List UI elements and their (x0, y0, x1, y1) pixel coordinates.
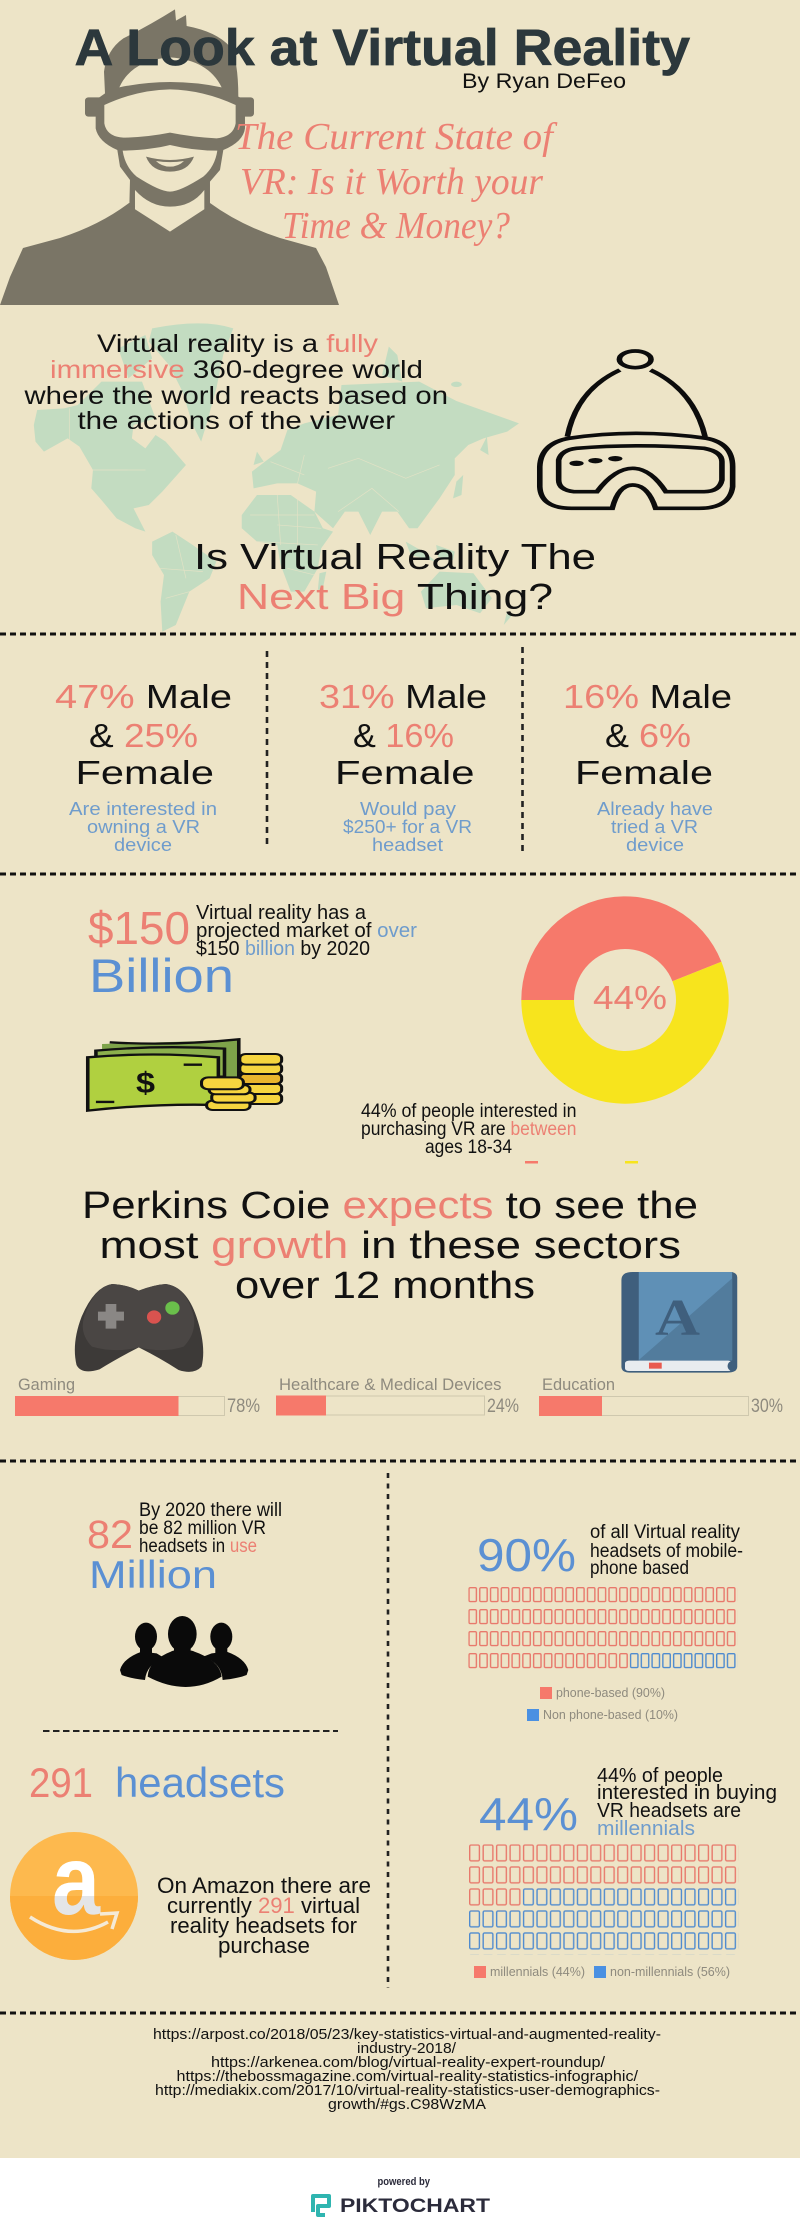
stat: 82 million headsets: headsets in use (139, 1536, 257, 1557)
legend: phone-based: Non phone-based (10%) (543, 1708, 678, 1722)
sources list (153, 2026, 661, 2113)
stat: 44 percent millennials: VR headsets are (597, 1800, 741, 1822)
icon: amazon logo: a (52, 1825, 101, 1935)
donut chart: 44% (593, 979, 667, 1016)
stat: 82 million headsets: Million (89, 1554, 217, 1597)
text: amazon headset count (157, 1873, 371, 1958)
title: A Look at Virtual Reality (74, 19, 691, 76)
stat: 90 percent mobile-phone based: 90% (477, 1529, 576, 1581)
sources list: http://mediakix.com/2017/10/virtual-reality-statistics-user-demographics- (155, 2082, 660, 2099)
intro text: Virtual reality is a fully (97, 330, 379, 358)
stat: 44 percent millennials (479, 1765, 777, 1840)
byline: By Ryan DeFeo (462, 70, 626, 93)
panel: already tried (563, 678, 732, 855)
sources list: https://thebossmagazine.com/virtual-reality-statistics-infographic/ (176, 2068, 639, 2085)
icon: book: A (655, 1290, 701, 1347)
stat: 90 percent mobile-phone based (477, 1522, 743, 1581)
footer: piktochart branding (313, 2176, 490, 2217)
stat: 90 percent mobile-phone based: headsets of mobile- (590, 1541, 743, 1562)
bar: gaming (15, 1375, 260, 1417)
text: amazon headset count: On Amazon there are (157, 1873, 371, 1898)
intro text: immersive 360-degree world (50, 356, 423, 384)
stat: 150 billion market: Virtual reality has a (196, 902, 367, 924)
panel: already tried: Already have (597, 799, 713, 819)
panel: would pay (319, 678, 487, 855)
donut chart caption (361, 1101, 576, 1158)
pictogram chart: phone-based headsets (468, 1587, 738, 1675)
bar: education: 30% (751, 1396, 783, 1417)
heading: next big thing: Next Big Thing? (237, 576, 553, 617)
stat: 150 billion market: $150 (88, 902, 190, 954)
donut chart caption: ages 18-34 (425, 1137, 512, 1158)
stat: 291 headsets (29, 1759, 285, 1806)
panel: already tried: device (626, 835, 684, 855)
intro text: where the world reacts based on (23, 382, 448, 410)
panel: would pay: Would pay (360, 799, 456, 819)
icon: book (621, 1272, 737, 1373)
text: amazon headset count: currently 291 virtual (167, 1893, 360, 1918)
icon: amazon logo (10, 1825, 138, 1960)
panel: interested in owning: & 25% (89, 717, 198, 754)
stat: 82 million headsets: By 2020 there will (139, 1500, 282, 1521)
panel: would pay: headset (372, 835, 443, 855)
intro text (23, 330, 448, 435)
sources list: https://arpost.co/2018/05/23/key-statistics-virtual-and-augmented-reality- (153, 2026, 661, 2043)
panel: interested in owning: device (114, 835, 172, 855)
legend: millennials (474, 1965, 730, 1979)
sources list: growth/#gs.C98WzMA (328, 2096, 486, 2113)
panel: would pay: 31% Male (319, 678, 487, 715)
heading: Perkins Coie growth: over 12 months (235, 1265, 535, 1307)
footer: piktochart branding: powered by (378, 2176, 431, 2188)
bar: gaming: 78% (227, 1396, 260, 1417)
icon: money and coins (88, 1039, 282, 1111)
heading: Perkins Coie growth: most growth in these sectors (100, 1225, 681, 1267)
panel: interested in owning: owning a VR (87, 817, 200, 837)
panel: would pay: & 16% (353, 717, 454, 754)
illustration: man wearing VR headset (0, 9, 339, 305)
subtitle in script lettering: VR: Is it Worth your (240, 161, 543, 203)
stat: 291 headsets: headsets (115, 1759, 285, 1806)
footer: piktochart branding: PIKTOCHART (340, 2196, 490, 2217)
panel: already tried: tried a VR (611, 817, 698, 837)
panel: interested in owning (55, 678, 232, 855)
stat: 90 percent mobile-phone based: of all Virtual reality (590, 1522, 740, 1543)
panel: interested in owning: 47% Male (55, 678, 232, 715)
donut legend swatches (clipped) (525, 1161, 638, 1164)
panel: already tried: 16% Male (563, 678, 732, 715)
stat: 44 percent millennials: 44% (479, 1788, 578, 1840)
donut chart caption: 44% of people interested in (361, 1101, 576, 1122)
donut chart (521, 896, 729, 1104)
donut chart caption: purchasing VR are between (361, 1119, 576, 1140)
stat: 82 million headsets: 82 (87, 1513, 133, 1557)
legend: phone-based: phone-based (90%) (556, 1686, 665, 1700)
bar: education: Education (542, 1375, 615, 1394)
bar: education (539, 1375, 783, 1417)
text: amazon headset count: reality headsets for (170, 1913, 357, 1938)
subtitle in script lettering: Time & Money? (282, 205, 510, 247)
intro text: the actions of the viewer (78, 407, 395, 435)
panel: would pay: Female (335, 754, 474, 791)
stat: 44 percent millennials: interested in buying (597, 1782, 777, 1804)
stat: 82 million headsets: be 82 million VR (139, 1518, 266, 1539)
stat: 90 percent mobile-phone based: phone based (590, 1558, 689, 1579)
icon: money and coins: $ (136, 1067, 155, 1100)
stat: 150 billion market (88, 902, 417, 1002)
icon: VR headset (540, 351, 733, 508)
stat: 150 billion market: Billion (89, 949, 234, 1002)
bar: gaming: Gaming (18, 1375, 75, 1394)
subtitle in script lettering (235, 116, 558, 247)
world map background (34, 323, 519, 632)
legend: phone-based (527, 1686, 678, 1722)
icon: game controller (75, 1284, 203, 1372)
icon: group of people (120, 1616, 248, 1687)
bar: healthcare and medical devices (276, 1375, 519, 1417)
heading: next big thing (194, 536, 596, 617)
bar: healthcare and medical devices: Healthcare & Medical Devices (279, 1375, 502, 1394)
bar: healthcare and medical devices: 24% (487, 1396, 519, 1417)
sources list: https://arkenea.com/blog/virtual-reality-expert-roundup/ (211, 2054, 606, 2071)
heading: Perkins Coie growth: Perkins Coie expects to see the (82, 1185, 698, 1227)
panel: interested in owning: Are interested in (69, 799, 217, 819)
legend: millennials: millennials (44%) (490, 1965, 585, 1979)
panel: interested in owning: Female (76, 754, 214, 791)
sources list: industry-2018/ (357, 2040, 457, 2057)
stat: 291 headsets: 291 (29, 1759, 93, 1806)
stat: 44 percent millennials: millennials (597, 1818, 695, 1840)
stat: 150 billion market: projected market of over (196, 920, 417, 942)
heading: next big thing: Is Virtual Reality The (194, 536, 596, 577)
stat: 82 million headsets (87, 1500, 282, 1597)
icon: amazon logo: a (52, 1825, 101, 1935)
stat: 150 billion market: $150 billion by 2020 (196, 938, 370, 960)
stat: 44 percent millennials: 44% of people (597, 1765, 723, 1787)
subtitle in script lettering: The Current State of (235, 116, 558, 158)
panel: would pay: $250+ for a VR (343, 817, 472, 837)
panel: already tried: Female (575, 754, 713, 791)
panel: already tried: & 6% (605, 717, 691, 754)
text: amazon headset count: purchase (218, 1933, 310, 1958)
heading: Perkins Coie growth (82, 1185, 698, 1307)
pictogram chart: millennials (469, 1844, 738, 1954)
legend: millennials: non-millennials (56%) (610, 1965, 730, 1979)
